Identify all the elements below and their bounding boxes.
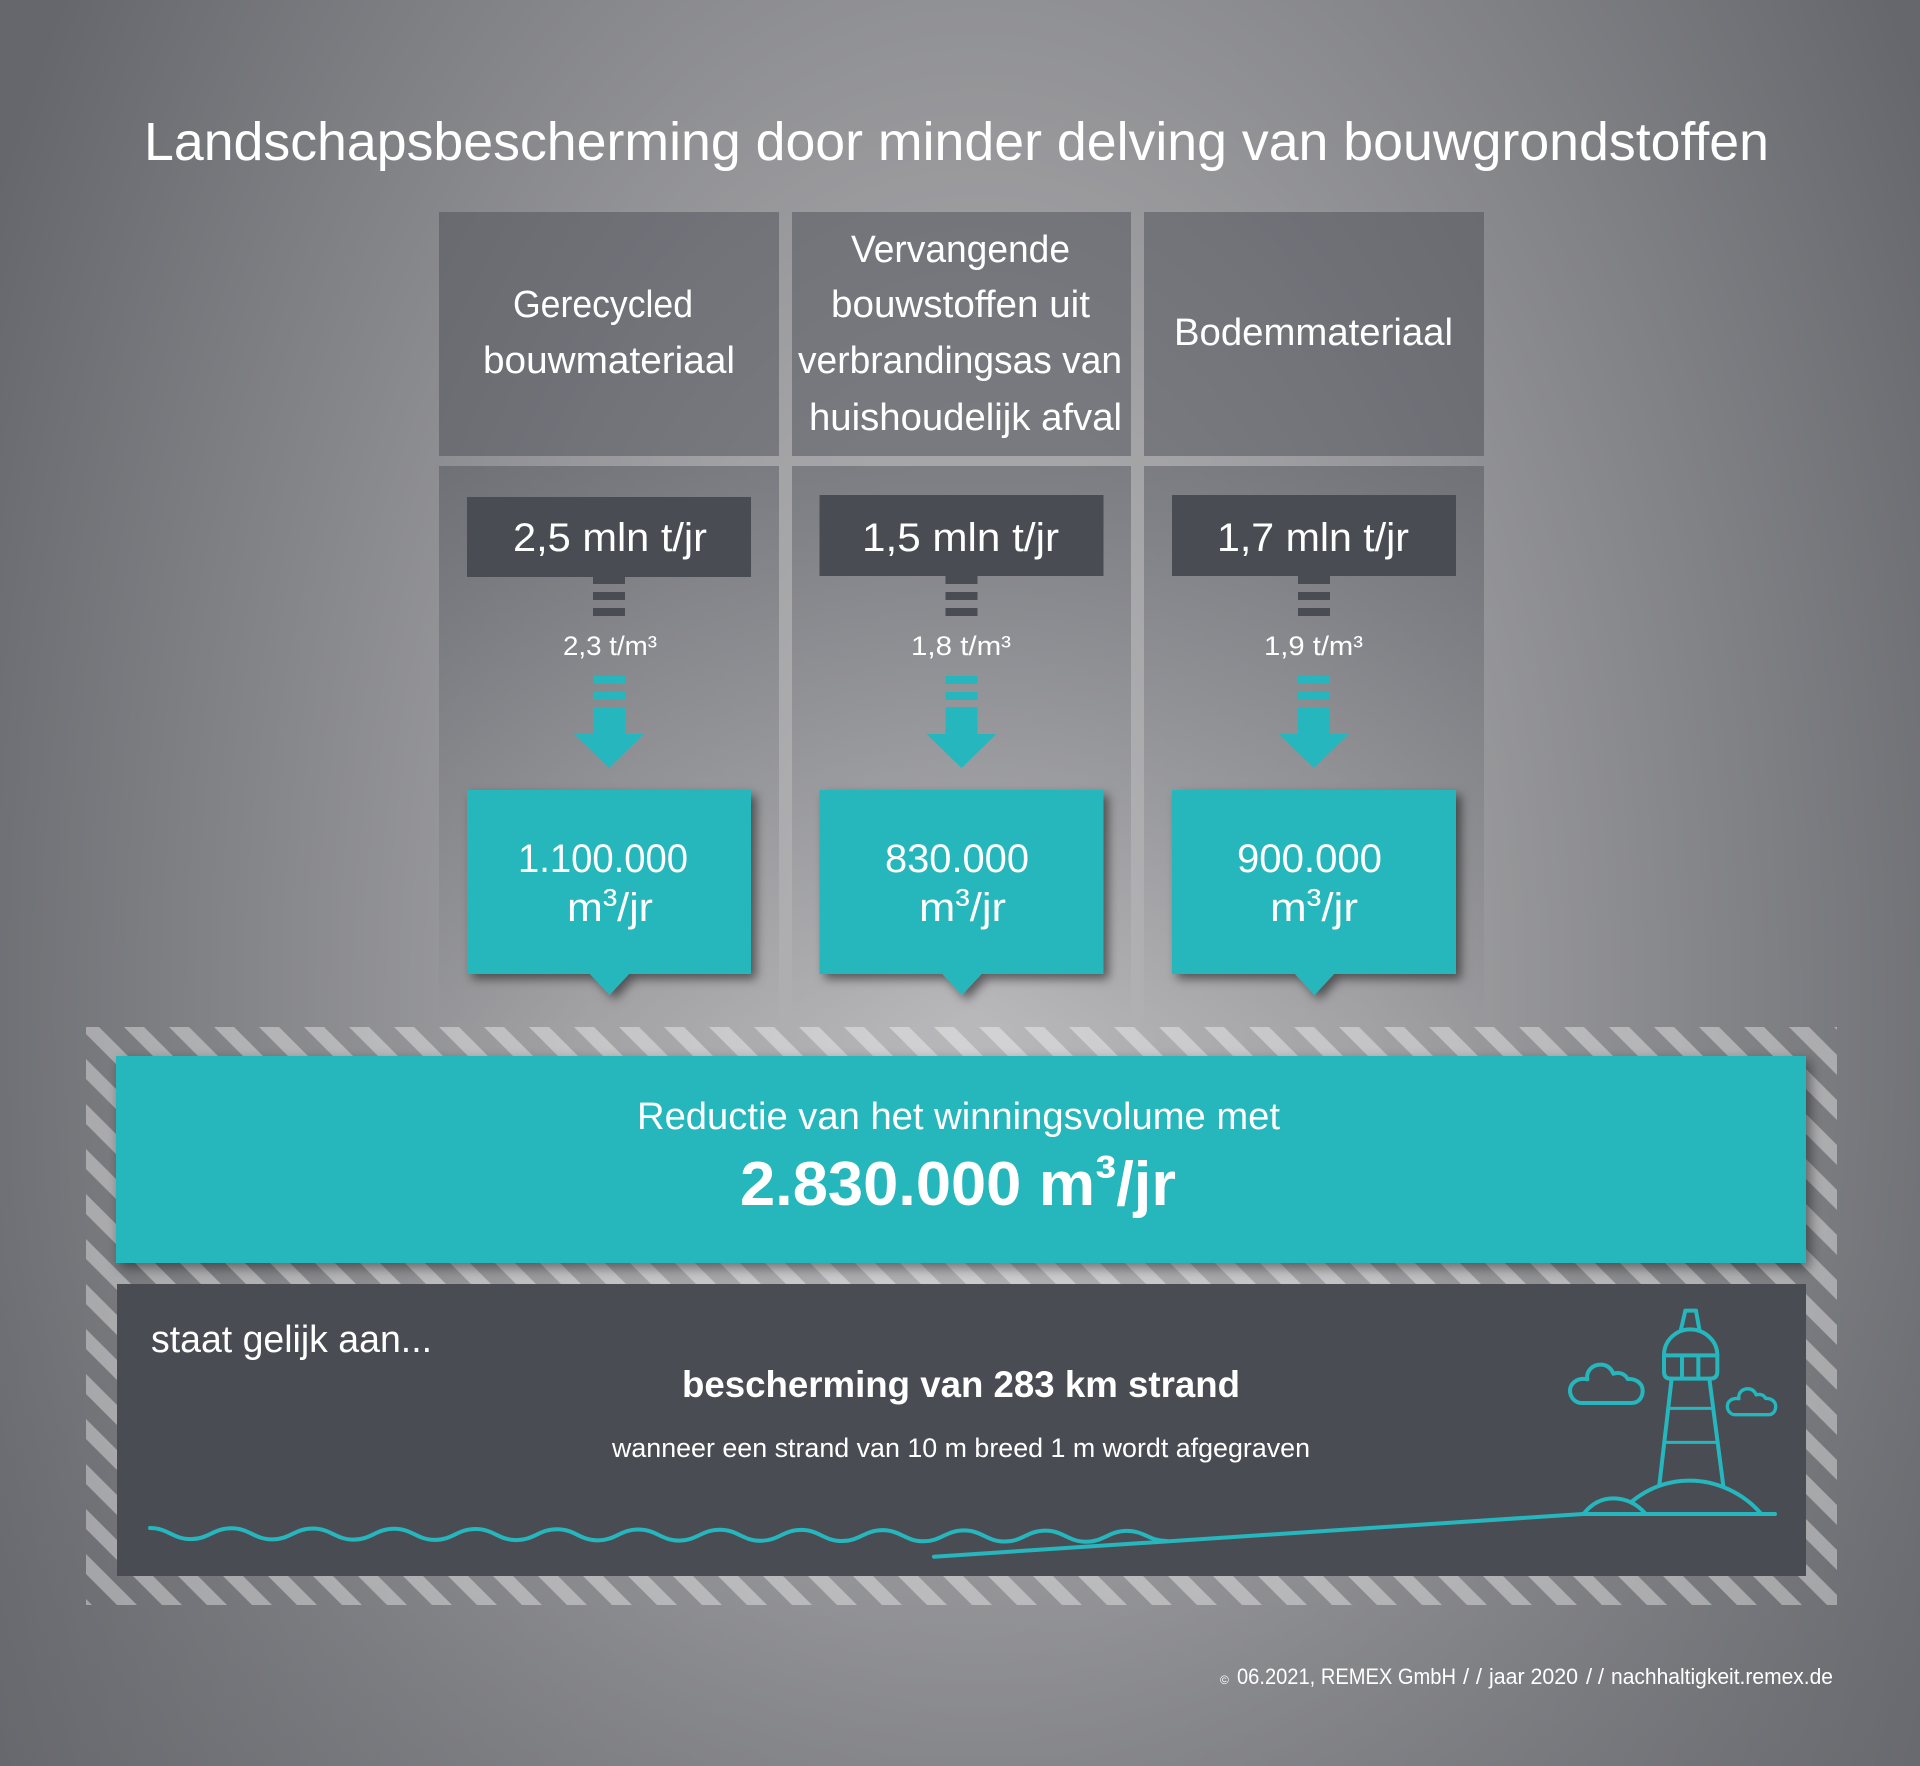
header panel: bodemmateriaal — [1144, 212, 1484, 456]
copyright footer: © — [1220, 1673, 1229, 1687]
lower panel background — [439, 466, 779, 1027]
reduction total: ³ — [1095, 1144, 1116, 1213]
reduction total: /jr — [1116, 1150, 1176, 1219]
column: vervangende bouwstoffen — [792, 212, 1131, 1027]
striped frame — [86, 1027, 1837, 1605]
arrow down — [1279, 676, 1349, 768]
tonnage box: 2,5 mln t/jr — [513, 516, 707, 560]
header panel: vervangende bouwstoffen: verbrandingsas van — [798, 340, 1122, 382]
lower panel background — [1144, 466, 1484, 1027]
dashed connector — [1298, 576, 1330, 616]
density label: 2,3 t/m³ — [563, 631, 657, 661]
title: Landschapsbescherming door minder delving van bouwgrondstoffen — [144, 112, 1769, 172]
dashed connector — [946, 576, 978, 616]
volume callout: 1.100.000 — [518, 837, 688, 881]
copyright footer: // — [1463, 1664, 1483, 1689]
header panel: vervangende bouwstoffen: huishoudelijk afval — [809, 397, 1122, 439]
volume callout: m — [919, 886, 952, 930]
header panel: bodemmateriaal: Bodemmateriaal — [1174, 312, 1453, 354]
density label: 1,9 t/m³ — [1264, 631, 1363, 661]
column: bodemmateriaal — [1144, 212, 1484, 1027]
volume callout: m — [567, 886, 600, 930]
header panel: vervangende bouwstoffen: bouwstoffen uit — [831, 284, 1090, 326]
reduction total: 2.830.000 m — [740, 1150, 1088, 1219]
header panel: vervangende bouwstoffen: Vervangende — [851, 229, 1070, 271]
icon: shoreline — [934, 1514, 1775, 1557]
column: gerecycled bouwmateriaal — [439, 212, 779, 1027]
copyright footer: // — [1586, 1664, 1605, 1689]
panel: total reduction — [116, 1056, 1806, 1263]
dashed connector — [593, 577, 625, 616]
density label: 1,8 t/m³ — [911, 631, 1011, 661]
header panel: gerecycled bouwmateriaal: Gerecycled — [513, 284, 693, 326]
volume callout: ³ — [1307, 882, 1321, 926]
volume callout: m — [1270, 886, 1303, 930]
volume callout: 830.000 — [885, 837, 1029, 881]
beach length: bescherming van 283 km strand — [682, 1364, 1240, 1405]
volume callout — [467, 790, 751, 995]
volume callout: ³ — [955, 882, 970, 926]
volume callout: 900.000 — [1237, 837, 1382, 881]
copyright footer: nachhaltigkeit.remex.de — [1611, 1664, 1833, 1689]
icon: sea waves — [150, 1528, 1167, 1542]
tonnage box — [820, 495, 1104, 576]
tonnage box — [1172, 495, 1456, 576]
header panel: gerecycled bouwmateriaal: bouwmateriaal — [483, 340, 735, 382]
lower panel background — [792, 466, 1131, 1027]
tonnage box: 1,7 mln t/jr — [1217, 516, 1409, 560]
reduction label: Reductie van het winningsvolume met — [637, 1096, 1280, 1138]
beach calculation note: wanneer een strand van 10 m breed 1 m wordt afgegraven — [611, 1433, 1310, 1463]
header panel: gerecycled bouwmateriaal — [439, 212, 779, 456]
volume callout: /jr — [970, 886, 1006, 930]
tonnage box — [467, 497, 751, 577]
volume callout: ³ — [603, 882, 617, 926]
volume callout — [1172, 790, 1456, 995]
copyright footer: jaar 2020 — [1488, 1664, 1578, 1689]
copyright footer — [1220, 1664, 1833, 1689]
icon: lighthouse with clouds — [1570, 1311, 1776, 1513]
lead-in text: staat gelijk aan... — [151, 1319, 432, 1361]
copyright footer: 06.2021, REMEX GmbH — [1237, 1664, 1456, 1689]
volume callout: /jr — [1321, 886, 1358, 930]
panel: beach equivalent — [117, 1284, 1806, 1576]
arrow down — [926, 676, 996, 768]
tonnage box: 1,5 mln t/jr — [862, 516, 1059, 560]
volume callout — [820, 790, 1104, 995]
arrow down — [574, 676, 644, 768]
volume callout: /jr — [617, 886, 653, 930]
header panel: vervangende bouwstoffen — [792, 212, 1131, 456]
